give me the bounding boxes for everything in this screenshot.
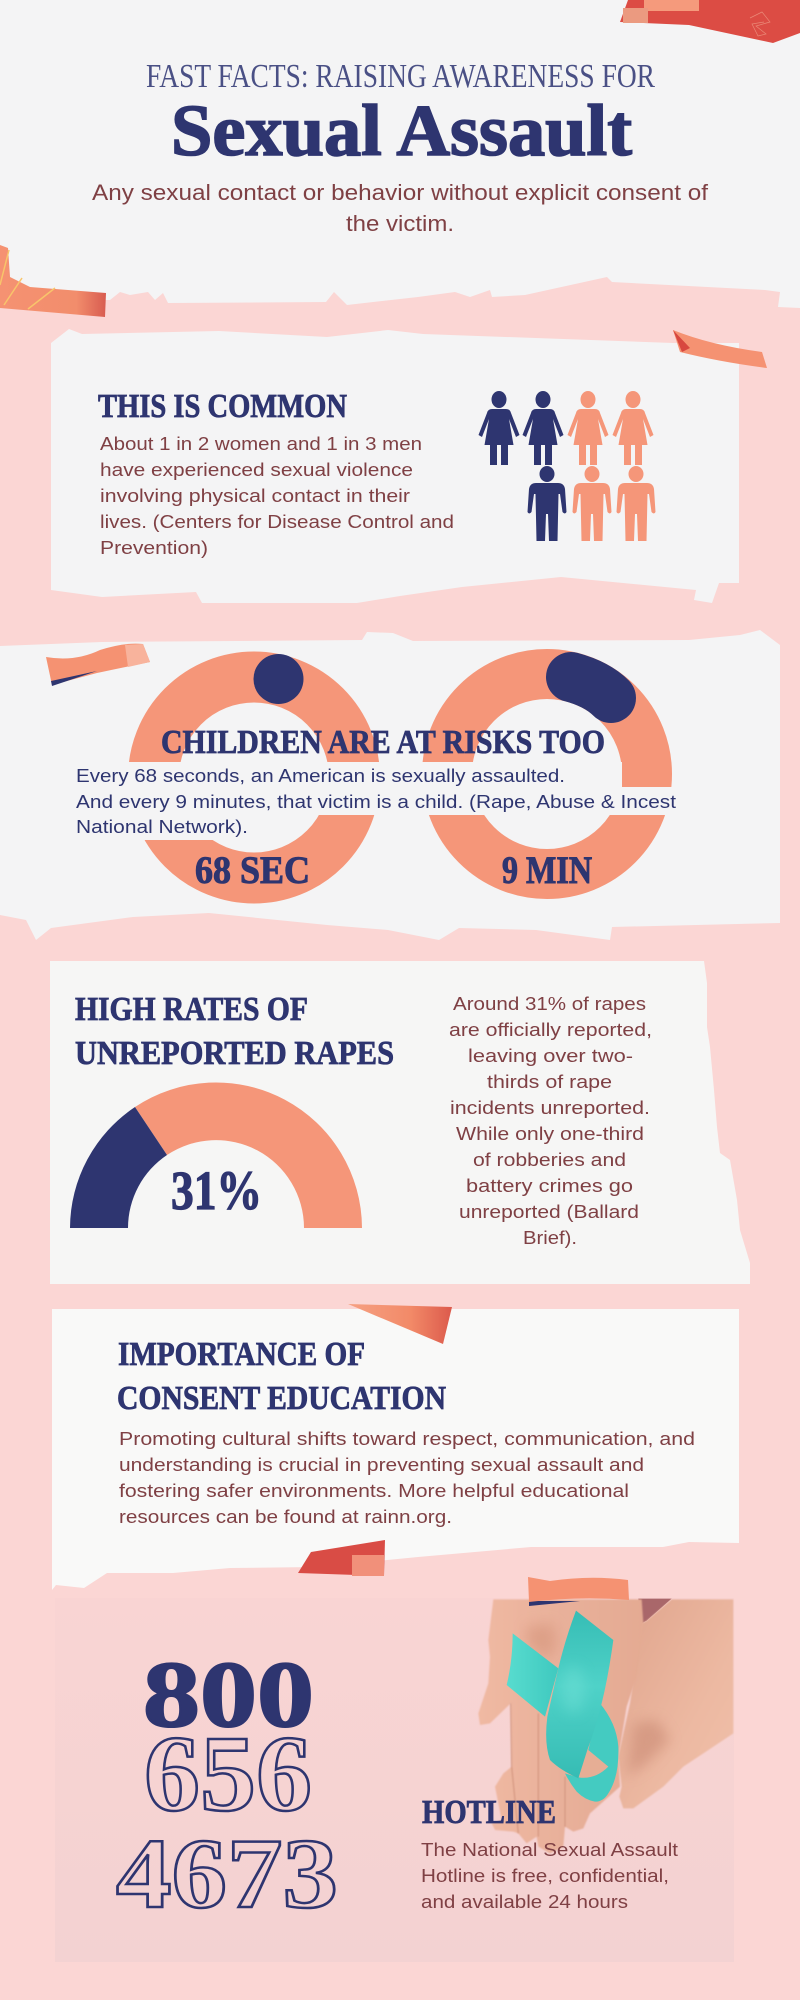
swatch: panel corner [673, 330, 767, 368]
decorative swatch: left [0, 245, 106, 317]
heading: importance of consent education: IMPORTANCE OF [118, 1336, 365, 1373]
heading: this is common: THIS IS COMMON [98, 388, 347, 425]
panel: children at risk [0, 630, 780, 940]
title: main heading: Sexual Assault [171, 90, 632, 171]
label: 68 sec: 68 SEC [195, 849, 310, 892]
text: unreported statistic: battery crimes go [466, 1176, 633, 1196]
heading: high rates of unreported rapes: HIGH RATES OF [75, 991, 308, 1028]
icon: women pictogram [478, 391, 654, 465]
phone number: 800: 800 [143, 1643, 314, 1747]
heading: high rates of unreported rapes [75, 991, 394, 1072]
text: unreported statistic: Around 31% of rapes [453, 994, 646, 1014]
text: children statistic [76, 766, 676, 837]
text: unreported statistic: thirds of rape [487, 1072, 612, 1092]
text: children statistic: Every 68 seconds, an American is sexually assaulted. [76, 766, 565, 786]
text: consent education: resources can be found at rainn.org. [119, 1507, 452, 1527]
heading: importance of consent education [117, 1336, 446, 1417]
title: kicker: FAST FACTS: RAISING AWARENESS FOR [146, 58, 655, 95]
text: unreported statistic: unreported (Ballard [459, 1202, 639, 1222]
text: unreported statistic: are officially reported, [449, 1020, 652, 1040]
text: common statistic: involving physical contact in their [100, 486, 410, 506]
text: consent education: understanding is crucial in preventing sexual assault and [119, 1455, 644, 1475]
swatch: photo corner [528, 1577, 629, 1606]
text: children statistic: And every 9 minutes, that victim is a child. (Rape, Abuse & Incest [76, 792, 676, 812]
panel: hotline [55, 1577, 734, 1962]
text: children statistic: National Network). [76, 817, 248, 837]
text: hotline description: Hotline is free, confidential, [421, 1866, 669, 1886]
swatch: top [348, 1304, 452, 1344]
chart: 9 min ring [447, 674, 647, 874]
text: common statistic: lives. (Centers for Disease Control and [100, 512, 454, 532]
text: consent education: fostering safer environments. More helpful educational [119, 1481, 629, 1501]
panel: unreported rapes [50, 961, 750, 1284]
header torn paper panel [0, 0, 800, 308]
swatch: panel corner [46, 644, 150, 686]
phone number: 656: 656 [144, 1715, 312, 1834]
heading: children are at risks too: CHILDREN ARE AT RISKS TOO [161, 724, 605, 761]
photo: hands holding teal ribbon [478, 1599, 733, 1853]
text: common statistic: About 1 in 2 women and 1 in 3 men [100, 434, 422, 454]
title: definition: Any sexual contact or behavior without explicit consent of [92, 180, 709, 205]
title: definition [92, 180, 709, 236]
text: common statistic: Prevention) [100, 538, 208, 558]
phone number: 4673: 4673 [116, 1818, 338, 1929]
panel: this is common [51, 329, 767, 603]
heading: high rates of unreported rapes: UNREPORTED RAPES [75, 1035, 394, 1072]
text background strips [60, 762, 680, 840]
text: hotline description: The National Sexual Assault [421, 1840, 678, 1860]
text: unreported statistic: While only one-third [456, 1124, 644, 1144]
title block [92, 58, 709, 236]
heading: importance of consent education: CONSENT EDUCATION [117, 1380, 446, 1417]
heading: hotline: HOTLINE [422, 1794, 556, 1831]
text: common statistic: have experienced sexual violence [100, 460, 413, 480]
label: 31 percent: 31% [171, 1160, 262, 1221]
text: common statistic [100, 434, 454, 558]
text: consent education [119, 1429, 695, 1527]
title: definition: the victim. [346, 211, 454, 236]
chart: 68 sec ring [154, 654, 354, 878]
text: unreported statistic: of robberies and [473, 1150, 626, 1170]
text: hotline description: and available 24 hours [421, 1892, 628, 1912]
decorative swatch: top right [620, 0, 800, 43]
text: unreported statistic [449, 994, 652, 1248]
chart: 31 percent gauge [70, 1082, 362, 1228]
icon: men pictogram [528, 466, 656, 541]
text: unreported statistic: incidents unreported. [450, 1098, 650, 1118]
text: unreported statistic: Brief). [523, 1228, 577, 1248]
swatch: bottom [298, 1540, 385, 1576]
text: unreported statistic: leaving over two- [468, 1046, 633, 1066]
text: consent education: Promoting cultural shifts toward respect, communication, and [119, 1429, 695, 1449]
text: hotline description [421, 1840, 678, 1912]
panel: consent education [52, 1304, 739, 1590]
label: 9 min: 9 MIN [502, 849, 592, 892]
